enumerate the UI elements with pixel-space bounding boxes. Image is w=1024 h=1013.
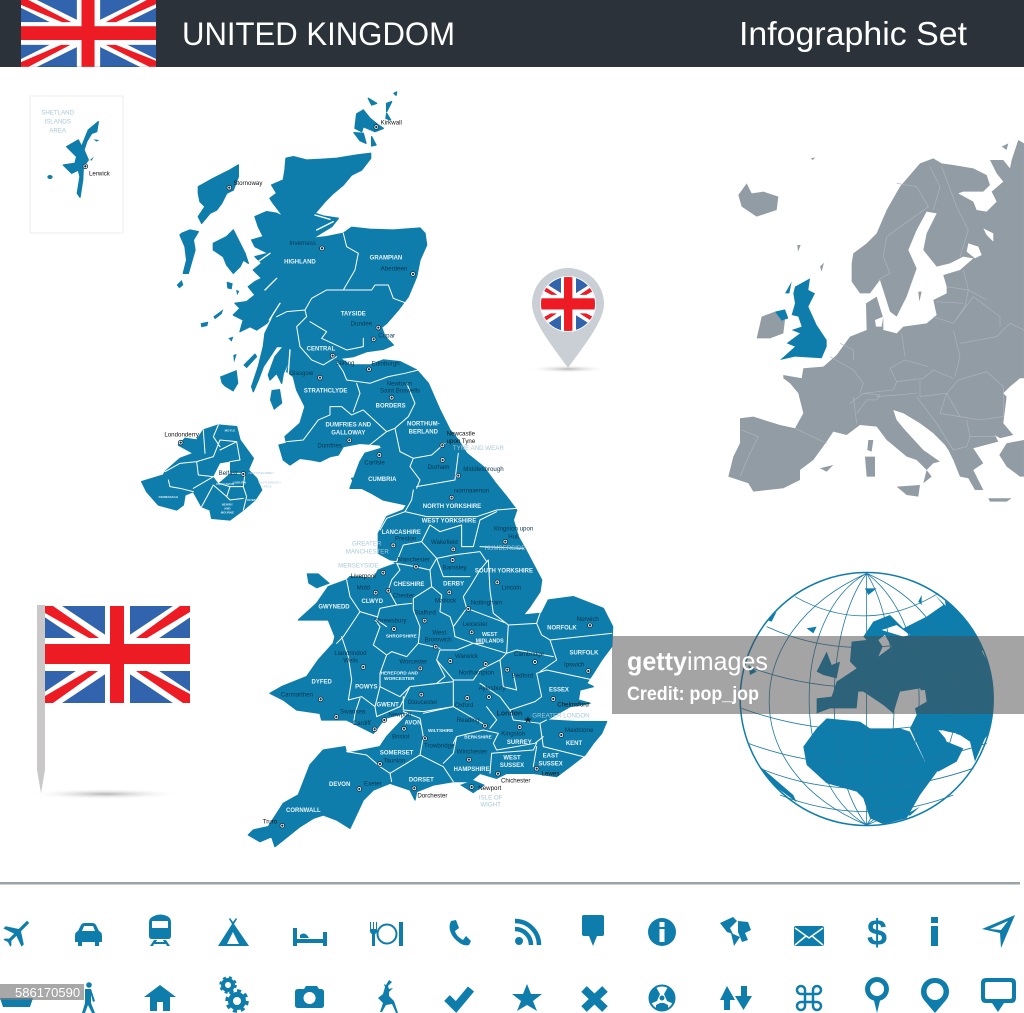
map: Northern Ireland: NEWRY <box>222 503 233 507</box>
city markers and labels: England and Wales: Mold <box>357 584 371 591</box>
city markers and labels: England and Wales: Warwick <box>455 653 479 660</box>
flag on pole <box>27 605 190 800</box>
globe graticule <box>742 573 993 825</box>
city markers and labels: England and Wales: Aylesbury <box>479 685 506 692</box>
map: Northern Ireland: CASTLEREAGH <box>258 480 281 484</box>
city markers and labels: England and Wales: SUSSEX <box>500 763 524 769</box>
icon: car <box>75 923 102 946</box>
city labels: Scotland: upon Tyne <box>447 438 476 445</box>
city markers and labels: England and Wales: Llandrindod <box>334 650 367 657</box>
city markers and labels: England and Wales: SOMERSET <box>380 751 414 757</box>
city markers and labels: England and Wales: ISLE OF <box>479 794 503 801</box>
city markers and labels: England and Wales: BERKSHIRE <box>464 735 492 740</box>
city markers and labels: England and Wales: Manchester <box>398 557 430 564</box>
icon: pin with large ring <box>921 978 949 1013</box>
city labels: Scotland: Dumfries <box>317 443 342 450</box>
city markers and labels: England and Wales: Wakefield <box>431 539 458 546</box>
icon: phone <box>450 920 471 945</box>
city markers and labels: England and Wales: Worcester <box>399 658 427 665</box>
city labels: Scotland: Stirling <box>336 360 355 367</box>
icon: bed <box>293 928 327 946</box>
city markers and labels: England and Wales: Ipswich <box>564 661 585 668</box>
city markers and labels: England and Wales: CHESHIRE <box>394 582 424 588</box>
city markers and labels: England and Wales: EAST <box>543 753 559 759</box>
city markers and labels: England and Wales: Leicester <box>463 621 488 628</box>
map: Northern Ireland: MOURNE <box>221 510 234 514</box>
city labels: Scotland: Edinburgh <box>372 361 400 368</box>
city markers and labels: England and Wales: ESSEX <box>549 687 569 693</box>
city markers and labels: England and Wales: Bristol <box>392 733 409 740</box>
map: Northern Ireland: Londonderry <box>164 432 200 439</box>
icon: up and down arrows <box>720 986 752 1010</box>
city markers and labels: England and Wales: DORSET <box>409 777 434 783</box>
city markers and labels: England and Wales: Dorchester <box>417 792 447 799</box>
city markers and labels: England and Wales: DEVON <box>329 782 350 788</box>
title: United Kingdom: UNITED KINGDOM <box>182 16 455 52</box>
city markers and labels: England and Wales: SUSSEX <box>538 761 563 767</box>
region borders: England and Wales <box>337 490 612 782</box>
city labels: Scotland: STRATHCLYDE <box>304 389 347 395</box>
icon: info <box>648 918 676 946</box>
watermark: gettyimages <box>612 636 1024 714</box>
icon: walker <box>82 982 95 1013</box>
subtitle: Infographic Set: Infographic Set <box>739 15 967 52</box>
city markers and labels: England and Wales: Hull <box>508 533 519 540</box>
map: England and Wales <box>248 478 613 847</box>
map: Northern Ireland: CRAIGAVON <box>216 482 234 486</box>
city markers and labels: England and Wales: Winchester <box>457 748 487 755</box>
city markers and labels: England and Wales: Chichester <box>501 777 530 784</box>
city markers and labels: England and Wales: Exeter <box>364 781 382 788</box>
map pin with flag <box>532 268 604 372</box>
icon: star <box>512 984 542 1011</box>
icon: navigation arrow <box>982 915 1015 948</box>
city markers and labels: England and Wales: Shrewsbury <box>374 618 407 625</box>
icon: ship <box>0 998 33 1007</box>
icon: command <box>797 986 821 1010</box>
city labels: Scotland: Carlisle <box>364 459 385 466</box>
city labels: Scotland: Inverness <box>289 240 316 247</box>
country borders <box>740 167 1024 477</box>
map: Northern Ireland: AND <box>224 507 231 511</box>
city markers and labels: England and Wales: GWYNEDD <box>318 604 350 610</box>
map: Northern Ireland: MOYLE <box>225 428 235 432</box>
header flag <box>21 0 156 67</box>
city labels: Scotland: Stornoway <box>233 180 263 187</box>
icon: cross <box>584 989 605 1009</box>
city markers and labels: England and Wales: GWENT <box>377 702 399 708</box>
panel: Shetland inset: SHETLAND <box>41 109 75 116</box>
map: Northern Ireland: NEWTOWNABBEY <box>248 471 274 475</box>
islands: Anglesey and Isle of Wight <box>307 573 485 793</box>
city markers and labels: England and Wales: HAMPSHIRE <box>454 767 490 773</box>
icon: plane <box>0 913 37 952</box>
city markers and labels: England and Wales: Bromwich <box>425 637 452 644</box>
city markers and labels: England and Wales: MANCHESTER <box>346 548 389 555</box>
city markers and labels: England and Wales: Maidstone <box>565 727 594 734</box>
city markers and labels: England and Wales: POWYS <box>355 685 377 691</box>
city labels: Scotland: GRAMPIAN <box>370 256 402 262</box>
divider <box>0 882 1020 884</box>
city markers and labels: England and Wales: West <box>432 629 447 636</box>
city markers and labels: England and Wales: WILTSHIRE <box>428 728 453 733</box>
map: Northern Ireland <box>142 425 281 520</box>
city labels: Scotland: Dundee <box>351 320 373 327</box>
city markers and labels: England and Wales: Trowbridge <box>424 742 455 749</box>
city markers and labels: England and Wales: Oxford <box>455 702 474 709</box>
icon: mail <box>794 926 824 946</box>
city markers and labels: England and Wales: LANCASHIRE <box>382 530 421 536</box>
city markers and labels: England and Wales: Gloucester <box>408 699 437 706</box>
watermark: gettyimages: gettyimages <box>627 646 768 676</box>
city markers and labels: England and Wales: Liverpool <box>351 573 376 580</box>
city markers and labels: England and Wales: CORNWALL <box>286 808 321 814</box>
city markers and labels: England and Wales: WEST <box>503 755 521 761</box>
header bar <box>0 0 1024 67</box>
city markers and labels: England and Wales: HUMBERSIDE <box>484 545 525 552</box>
globe <box>740 572 997 826</box>
city markers and labels: England and Wales: Matlock <box>435 598 457 605</box>
city markers and labels: England and Wales: Kingston <box>501 730 526 737</box>
islands and neighbouring land <box>738 143 1024 502</box>
city markers and labels: England and Wales: NORFOLK <box>547 626 577 632</box>
city labels: Scotland: GALLOWAY <box>331 430 365 436</box>
city markers and labels: England and Wales: Chester <box>393 593 414 600</box>
city markers and labels: England and Wales: CLWYD <box>362 599 384 605</box>
city markers and labels: England and Wales: Swansea <box>340 709 366 716</box>
city labels: Scotland: Middlesbrough <box>463 466 504 473</box>
city markers and labels: England and Wales: Reading <box>457 717 480 724</box>
city markers and labels: England and Wales: Stafford <box>414 609 436 616</box>
icon: letter i <box>931 917 938 946</box>
city markers and labels: England and Wales: Norwich <box>577 616 599 623</box>
city labels: Scotland: BORDERS <box>376 404 406 410</box>
city labels: Scotland: TAYSIDE <box>341 311 366 317</box>
city markers and labels: England and Wales: WEST YORKSHIRE <box>422 518 476 524</box>
city markers and labels: England and Wales: Lewes <box>542 771 559 778</box>
watermark: image number: 586170590 <box>15 985 80 1000</box>
icon: speech marker <box>582 915 604 946</box>
city markers and labels: England and Wales: MIDLANDS <box>476 639 504 645</box>
icon: pin with small ring <box>865 977 889 1013</box>
city labels: Scotland: CUMBRIA <box>368 477 397 483</box>
city markers and labels: England and Wales: Newport <box>388 711 412 718</box>
panel: Shetland inset: ISLANDS <box>44 118 71 125</box>
city markers and labels: England and Wales: NORTH YORKSHIRE <box>423 504 481 510</box>
icon: deer <box>378 980 398 1013</box>
city markers and labels: England and Wales: Preston <box>395 536 417 543</box>
city markers and labels: England and Wales: Truro <box>263 818 278 825</box>
city labels: Scotland: Newtown <box>387 380 413 387</box>
icon: check <box>447 989 471 1007</box>
city markers and labels: England and Wales: Chelmsford <box>557 702 589 709</box>
icon: dollar: $ <box>867 912 887 953</box>
icon: rss <box>515 921 539 945</box>
city markers and labels: England and Wales: GREATER <box>352 541 382 548</box>
city markers and labels: England and Wales: DERBY <box>443 582 464 588</box>
icon: dining <box>370 922 403 946</box>
city markers and labels: England and Wales: HEREFORD AND <box>381 670 419 675</box>
city markers and labels: England and Wales: Lincoln <box>502 584 522 591</box>
city markers and labels: England and Wales: MERSEYSIDE <box>338 563 379 570</box>
city markers and labels: England and Wales: GREATER LONDON <box>532 712 590 719</box>
city markers and labels: England and Wales: Northallerton <box>454 488 490 495</box>
city markers and labels: England and Wales: WEST <box>482 632 498 638</box>
city markers and labels: England and Wales: Cardiff <box>353 720 371 727</box>
city labels: Scotland: DUMFRIES AND <box>325 423 372 429</box>
icon: speech bubble outline <box>981 978 1016 1012</box>
city markers and labels: England and Wales: DYFED <box>312 680 332 686</box>
United Kingdom highlight <box>775 278 827 360</box>
city markers and labels: England and Wales: London <box>497 710 522 717</box>
icon: train <box>149 914 171 946</box>
city markers and labels: England and Wales: WIGHT <box>480 802 501 809</box>
city markers and labels: England and Wales: WORCESTER <box>384 676 415 681</box>
city markers and labels: England and Wales: Carmarthen <box>281 691 314 698</box>
icon: gears <box>220 978 247 1011</box>
city markers and labels: England and Wales: SURFOLK <box>569 650 599 656</box>
city markers and labels: England and Wales: Kingston upon <box>494 526 534 533</box>
map: Northern Ireland: Belfast <box>219 470 238 477</box>
city labels: Scotland <box>227 119 504 483</box>
watermark: gettyimages: Credit: pop_jop <box>627 684 759 705</box>
city markers and labels: England and Wales: Bedford <box>512 673 534 680</box>
city markers and labels: England and Wales <box>263 488 599 828</box>
map: Northern Ireland: ARDS <box>263 485 272 489</box>
city markers and labels: England and Wales: Barnsley <box>443 564 468 571</box>
city labels: Scotland: Aberdeen <box>381 266 408 273</box>
city markers and labels: England and Wales: SHROPSHIRE <box>386 633 417 638</box>
city markers and labels: England and Wales: SURREY <box>507 740 532 746</box>
city labels: Scotland: Saint Boswells <box>380 387 420 394</box>
panel: Shetland inset <box>30 96 123 233</box>
city labels: Scotland: HIGHLAND <box>284 259 316 265</box>
city markers and labels: England and Wales: Wells <box>343 657 358 664</box>
city labels: Scotland: Cupar <box>378 332 395 339</box>
map: Northern Ireland: LISBURN <box>233 480 246 484</box>
icon: radiation <box>649 986 675 1010</box>
panel: Shetland inset: Lerwick <box>89 170 111 177</box>
city labels: Scotland: BERLAND <box>409 429 439 435</box>
map: Northern Ireland: FERMANAGH <box>159 495 178 499</box>
icon: camera <box>295 986 324 1008</box>
region borders: Scotland <box>277 233 458 488</box>
icon: world <box>720 917 751 946</box>
city labels: Scotland: Kirkwall <box>381 119 402 126</box>
city labels: Scotland: TYNE AND WEAR <box>453 445 504 452</box>
city markers and labels: England and Wales: Northampton <box>459 669 495 676</box>
islands: Hebrides and Orkney <box>177 92 397 410</box>
city labels: Scotland: CENTRAL <box>307 347 336 353</box>
map: Scotland and northern England <box>177 92 504 488</box>
city labels: Scotland: Durham <box>428 464 450 471</box>
city markers and labels: England and Wales: SOUTH YORKSHIRE <box>475 569 533 575</box>
icon set <box>0 912 1016 1013</box>
city markers and labels: England and Wales: Newport <box>478 785 502 792</box>
city markers and labels: England and Wales: KENT <box>566 741 582 747</box>
city labels: Scotland: Glasgow <box>289 370 314 377</box>
city markers and labels: England and Wales: AVON <box>405 720 421 726</box>
city labels: Scotland: Newcastle <box>447 430 476 437</box>
panel: Shetland inset: AREA <box>49 127 67 134</box>
city markers and labels: England and Wales: Nottingham <box>471 600 502 607</box>
city markers and labels: England and Wales: Cambridge <box>514 651 545 658</box>
map: Europe locator <box>728 140 1024 502</box>
city labels: Scotland: NORTHUM- <box>407 422 440 428</box>
map: Northern Ireland: DOWN <box>247 498 257 502</box>
icon: house <box>144 985 176 1011</box>
icon: tent <box>218 918 249 946</box>
city markers and labels: England and Wales: Taunton <box>383 758 406 765</box>
